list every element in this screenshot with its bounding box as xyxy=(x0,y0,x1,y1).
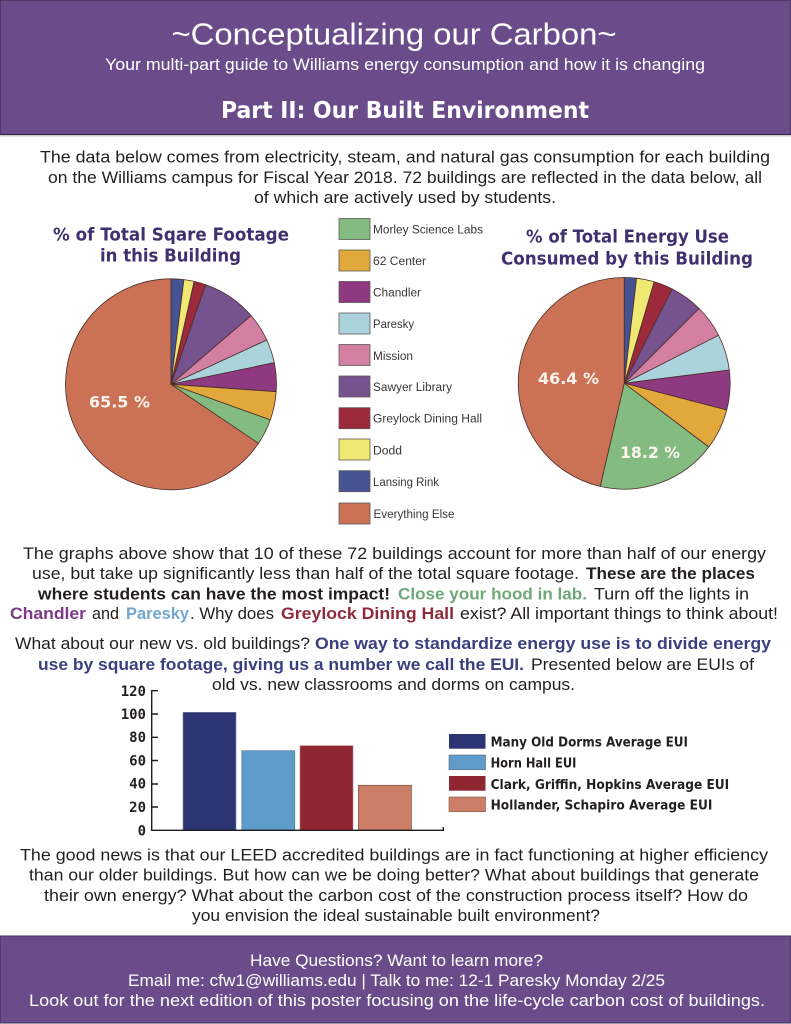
legend: buildings: Chandler xyxy=(373,288,421,300)
text block: EUI explanation: Presented below are EUIs of xyxy=(531,655,754,674)
text block: intro: of which are actively used by students. xyxy=(254,188,556,207)
text block: EUI explanation xyxy=(15,634,772,694)
panel: footer banner: Have Questions? Want to learn more? xyxy=(250,951,543,970)
legend: EUI bars: Clark, Griffin, Hopkins Average EUI xyxy=(491,778,729,793)
legend: buildings: Lansing Rink xyxy=(373,477,439,489)
text block: graphs explanation: These are the places xyxy=(586,564,755,583)
panel: footer banner: Email me: cfw1@williams.edu | Talk to me: 12-1 Paresky Monday 2/25 xyxy=(128,971,665,990)
heading: part II: Part II: Our Built Environment xyxy=(221,98,589,124)
text block: EUI explanation: One way to standardize energy use is to divide energy xyxy=(315,634,772,653)
legend: EUI bars: Hollander, Schapiro Average EUI xyxy=(491,799,712,814)
text block: graphs explanation: Turn off the lights in xyxy=(594,584,749,604)
text block: good news: their own energy? What about the carbon cost of the construction process itself? How do xyxy=(44,886,748,905)
pie chart: energy use xyxy=(518,277,730,489)
legend: buildings: Everything Else xyxy=(374,509,454,521)
heading: square footage chart: in this Building xyxy=(100,246,241,267)
bar chart: EUI: 0 xyxy=(138,823,146,839)
text block: graphs explanation: . Why does xyxy=(190,604,274,623)
panel: header banner xyxy=(0,0,791,136)
text block: graphs explanation: where students can have the most impact! xyxy=(37,584,390,604)
text block: graphs explanation: The graphs above show that 10 of these 72 buildings account for more than half of our energy xyxy=(23,544,767,563)
text block: good news: The good news is that our LEED accredited buildings are in fact functioning at higher efficiency xyxy=(20,846,769,865)
data label: 18.2 percent: 18.2 % xyxy=(620,443,680,462)
bar chart: EUI: 60 xyxy=(129,753,146,769)
text block: EUI explanation: What about our new vs. old buildings? xyxy=(15,634,310,653)
text block: intro: The data below comes from electricity, steam, and natural gas consumption for each building xyxy=(40,148,770,167)
text block: intro: on the Williams campus for Fiscal Year 2018. 72 buildings are reflected in the data below, all xyxy=(48,168,762,187)
heading: square footage chart xyxy=(53,225,289,267)
pie chart: square footage xyxy=(66,279,276,490)
bar chart: EUI: 120 xyxy=(121,684,146,700)
text block: graphs explanation: exist? All important things to think about! xyxy=(460,604,778,623)
text block: good news: you envision the ideal sustainable built environment? xyxy=(192,906,600,925)
text block: intro xyxy=(40,148,770,207)
panel: footer banner: Look out for the next edition of this poster focusing on the life-cycle carbon cost of buildings. xyxy=(29,991,765,1010)
legend: buildings: Mission xyxy=(373,351,413,363)
text block: graphs explanation: Paresky xyxy=(126,604,190,623)
text block: graphs explanation: use, but take up significantly less than half of the total square footage. xyxy=(32,564,579,583)
text block: good news: than our older buildings. But how can we be doing better? What about buildings that generate xyxy=(29,866,759,885)
bar: hollander schapiro xyxy=(358,785,411,830)
bar chart: EUI: 40 xyxy=(129,777,146,793)
legend: buildings: Morley Science Labs xyxy=(373,224,483,236)
text block: graphs explanation xyxy=(10,544,778,623)
bar: clark griffin hopkins xyxy=(300,746,353,830)
bar chart: EUI: 20 xyxy=(129,800,146,816)
legend: buildings xyxy=(339,218,483,524)
data label: 46.4 percent: 46.4 % xyxy=(538,369,599,388)
legend: buildings: Sawyer Library xyxy=(373,382,452,394)
legend: buildings: Dodd xyxy=(373,445,402,457)
legend: buildings: 62 Center xyxy=(373,256,426,268)
text block: graphs explanation: Greylock Dining Hall xyxy=(281,604,454,623)
text block: graphs explanation: and xyxy=(92,604,119,623)
legend: EUI bars: Horn Hall EUI xyxy=(491,757,576,772)
data label: 65.5 percent: 65.5 % xyxy=(89,393,150,412)
heading: square footage chart: % of Total Sqare Footage xyxy=(53,225,289,246)
heading: energy use chart xyxy=(501,227,753,269)
bar chart: EUI: 80 xyxy=(129,730,146,746)
text block: EUI explanation: old vs. new classrooms and dorms on campus. xyxy=(212,675,575,694)
legend: buildings: Paresky xyxy=(373,319,414,331)
bar chart: EUI: 100 xyxy=(121,707,146,723)
legend: EUI bars xyxy=(449,734,729,814)
bar chart: EUI xyxy=(121,684,443,839)
heading: energy use chart: Consumed by this Building xyxy=(501,248,753,269)
title: ~Conceptualizing our Carbon~ xyxy=(172,16,616,52)
heading: energy use chart: % of Total Energy Use xyxy=(526,227,729,248)
text block: good news xyxy=(20,846,769,925)
bar: horn hall xyxy=(242,751,295,830)
bar: many old dorms xyxy=(183,712,236,830)
legend: EUI bars: Many Old Dorms Average EUI xyxy=(491,736,688,751)
legend: buildings: Greylock Dining Hall xyxy=(373,414,482,426)
text block: EUI explanation: use by square footage, giving us a number we call the EUI. xyxy=(38,655,524,674)
panel: footer banner xyxy=(0,936,791,1023)
text block: graphs explanation: Close your hood in lab. xyxy=(398,584,587,604)
subtitle: Your multi-part guide to Williams energy consumption and how it is changing xyxy=(105,55,705,74)
text block: graphs explanation: Chandler xyxy=(10,604,86,623)
